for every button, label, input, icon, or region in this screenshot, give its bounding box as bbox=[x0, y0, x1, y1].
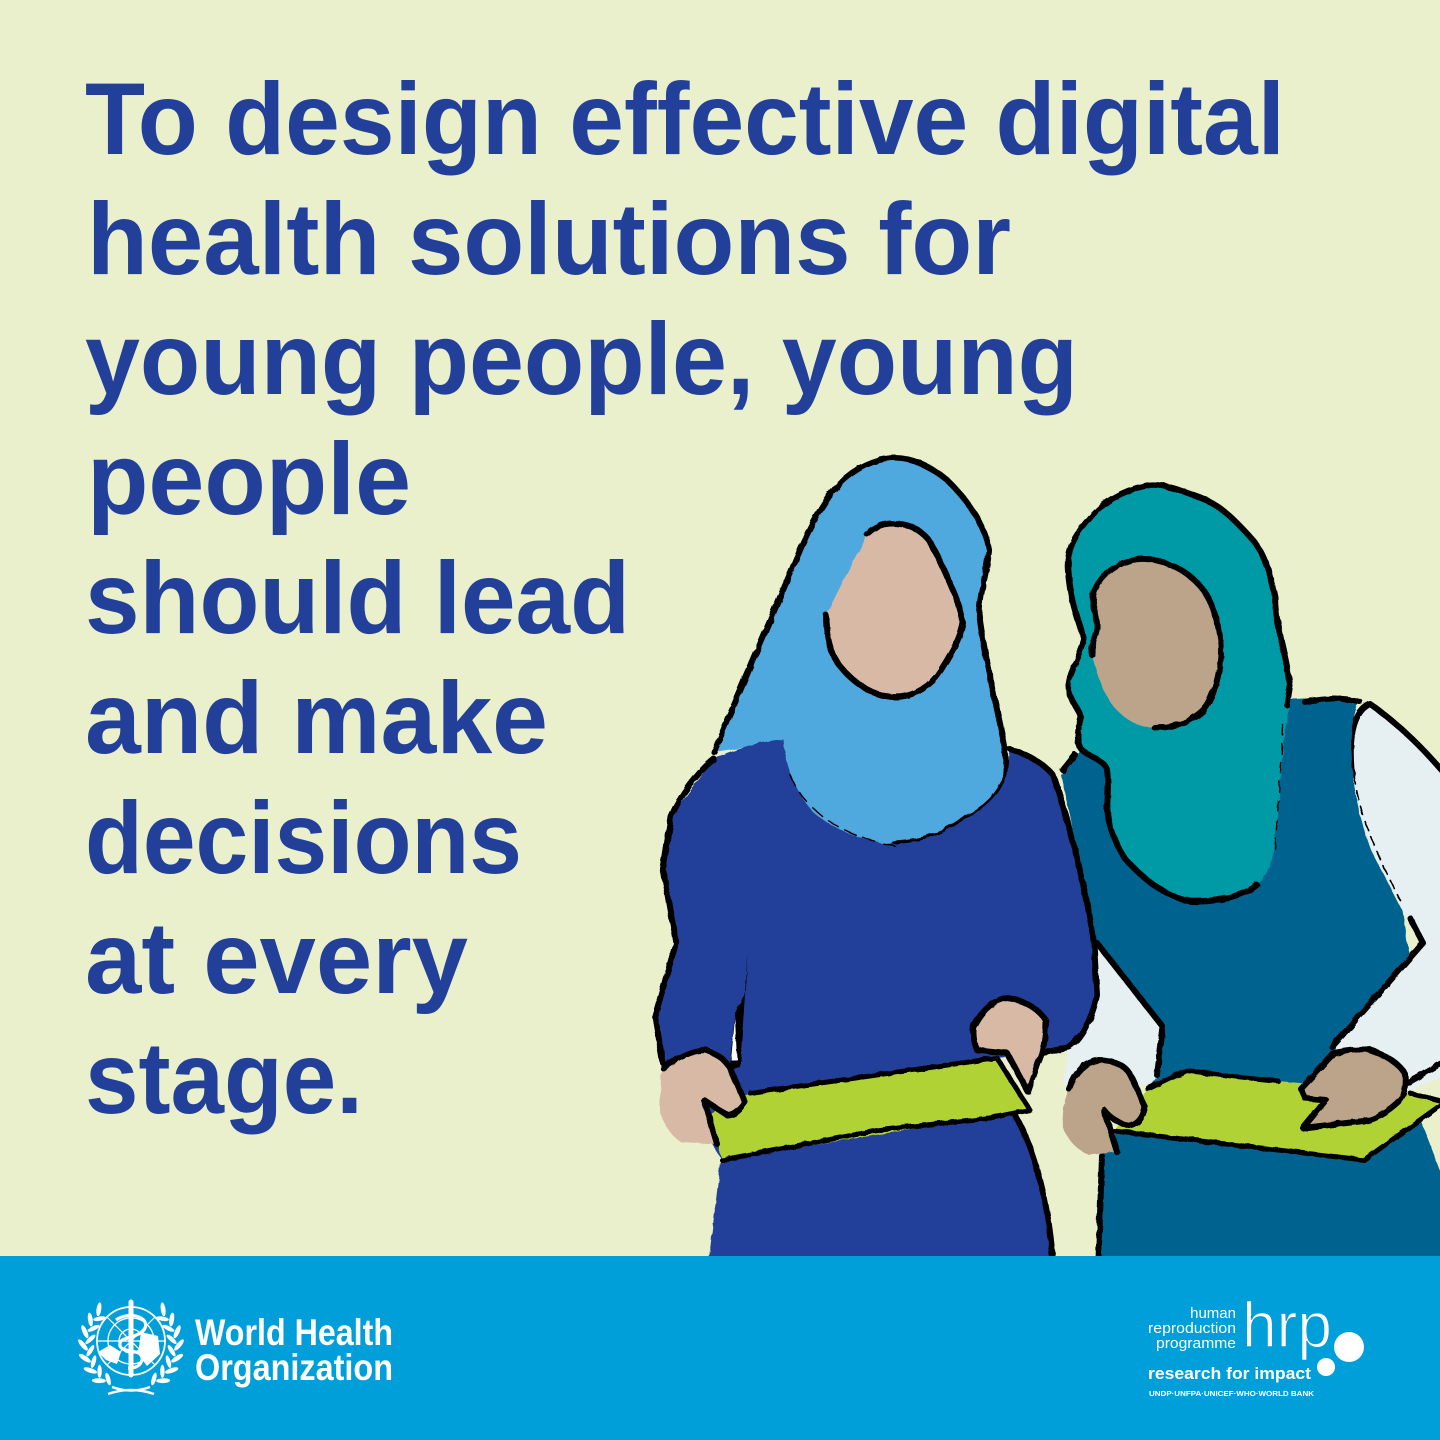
left woman: sleeve fold highlight bbox=[731, 1018, 737, 1060]
right woman: hijab bbox=[1068, 485, 1290, 901]
left woman: skirt right edge bbox=[1015, 1115, 1054, 1275]
left woman: hijab outline bbox=[714, 458, 1007, 844]
left woman: hijab bbox=[714, 458, 1007, 844]
left woman: sleeve fold bbox=[729, 950, 748, 1070]
right woman: vest outlines bbox=[1063, 698, 1423, 1275]
right woman: left hand outline bbox=[1069, 1060, 1145, 1152]
title: stage. bbox=[85, 1021, 363, 1135]
left woman: hijab lower sketch line bbox=[790, 775, 895, 846]
left woman: paper outline bbox=[722, 1058, 1030, 1160]
right woman: left hand bbox=[1063, 1060, 1145, 1155]
WHO wordmark bbox=[195, 1312, 393, 1388]
title: health solutions for bbox=[87, 182, 1011, 296]
programme name: human bbox=[1190, 1305, 1236, 1322]
title: should lead bbox=[85, 541, 630, 655]
partners: UNDP·UNFPA·UNICEF·WHO·WORLD BANK bbox=[1149, 1389, 1315, 1398]
left woman: top bbox=[655, 739, 1097, 1160]
footer band bbox=[0, 1256, 1440, 1440]
programme name: reproduction bbox=[1148, 1320, 1236, 1337]
woman on the right bbox=[1061, 485, 1440, 1275]
icon: WHO emblem bbox=[77, 1302, 185, 1394]
right woman: vest bbox=[1061, 698, 1440, 1275]
right woman: hijab outline bbox=[1068, 485, 1290, 901]
right woman: face outline bbox=[1092, 559, 1221, 728]
right woman: right sleeve bbox=[1332, 704, 1440, 1095]
WHO wordmark: World Health bbox=[195, 1312, 393, 1353]
left woman: skirt bbox=[707, 1110, 1054, 1275]
title: young people, young bbox=[85, 302, 1078, 416]
left woman: left hand bbox=[660, 1050, 745, 1144]
left woman: right hand bbox=[973, 998, 1046, 1092]
title: at every bbox=[85, 901, 468, 1015]
right woman: sleeve inner sketch line bbox=[1354, 775, 1400, 900]
right woman: paper outline bbox=[1114, 1071, 1440, 1160]
title: and make bbox=[85, 661, 548, 775]
WHO wordmark: Organization bbox=[195, 1347, 393, 1388]
illustration: two young women reading a document bbox=[655, 458, 1440, 1275]
right woman: sleeve outer outline bbox=[1351, 704, 1440, 1086]
title: decisions bbox=[85, 781, 522, 895]
WHO logo bbox=[77, 1302, 393, 1394]
right woman: face bbox=[1092, 559, 1221, 728]
programme name bbox=[1148, 1305, 1236, 1352]
left woman: paper bbox=[711, 1058, 1030, 1160]
HRP logo bbox=[1148, 1289, 1364, 1398]
right woman: left sleeve bbox=[1063, 943, 1163, 1085]
icon: dots bbox=[1317, 1332, 1364, 1376]
right woman: hijab edge sketch bbox=[1275, 725, 1283, 850]
left woman: left hand outline bbox=[663, 1050, 745, 1144]
title bbox=[85, 62, 1285, 1135]
tagline: research for impact bbox=[1148, 1365, 1312, 1383]
title: To design effective digital bbox=[85, 62, 1285, 176]
programme name: programme bbox=[1156, 1335, 1236, 1352]
title: people bbox=[87, 422, 411, 536]
left woman: face bbox=[826, 523, 963, 697]
left woman: face outline bbox=[826, 523, 963, 697]
right woman: paper bbox=[1114, 1071, 1440, 1160]
document and hands bbox=[660, 998, 1440, 1160]
woman on the left bbox=[655, 458, 1097, 1275]
left woman: top outline bbox=[655, 749, 1097, 1063]
right woman: right hand bbox=[1301, 1049, 1405, 1128]
hrp wordmark: hrp bbox=[1242, 1289, 1332, 1361]
